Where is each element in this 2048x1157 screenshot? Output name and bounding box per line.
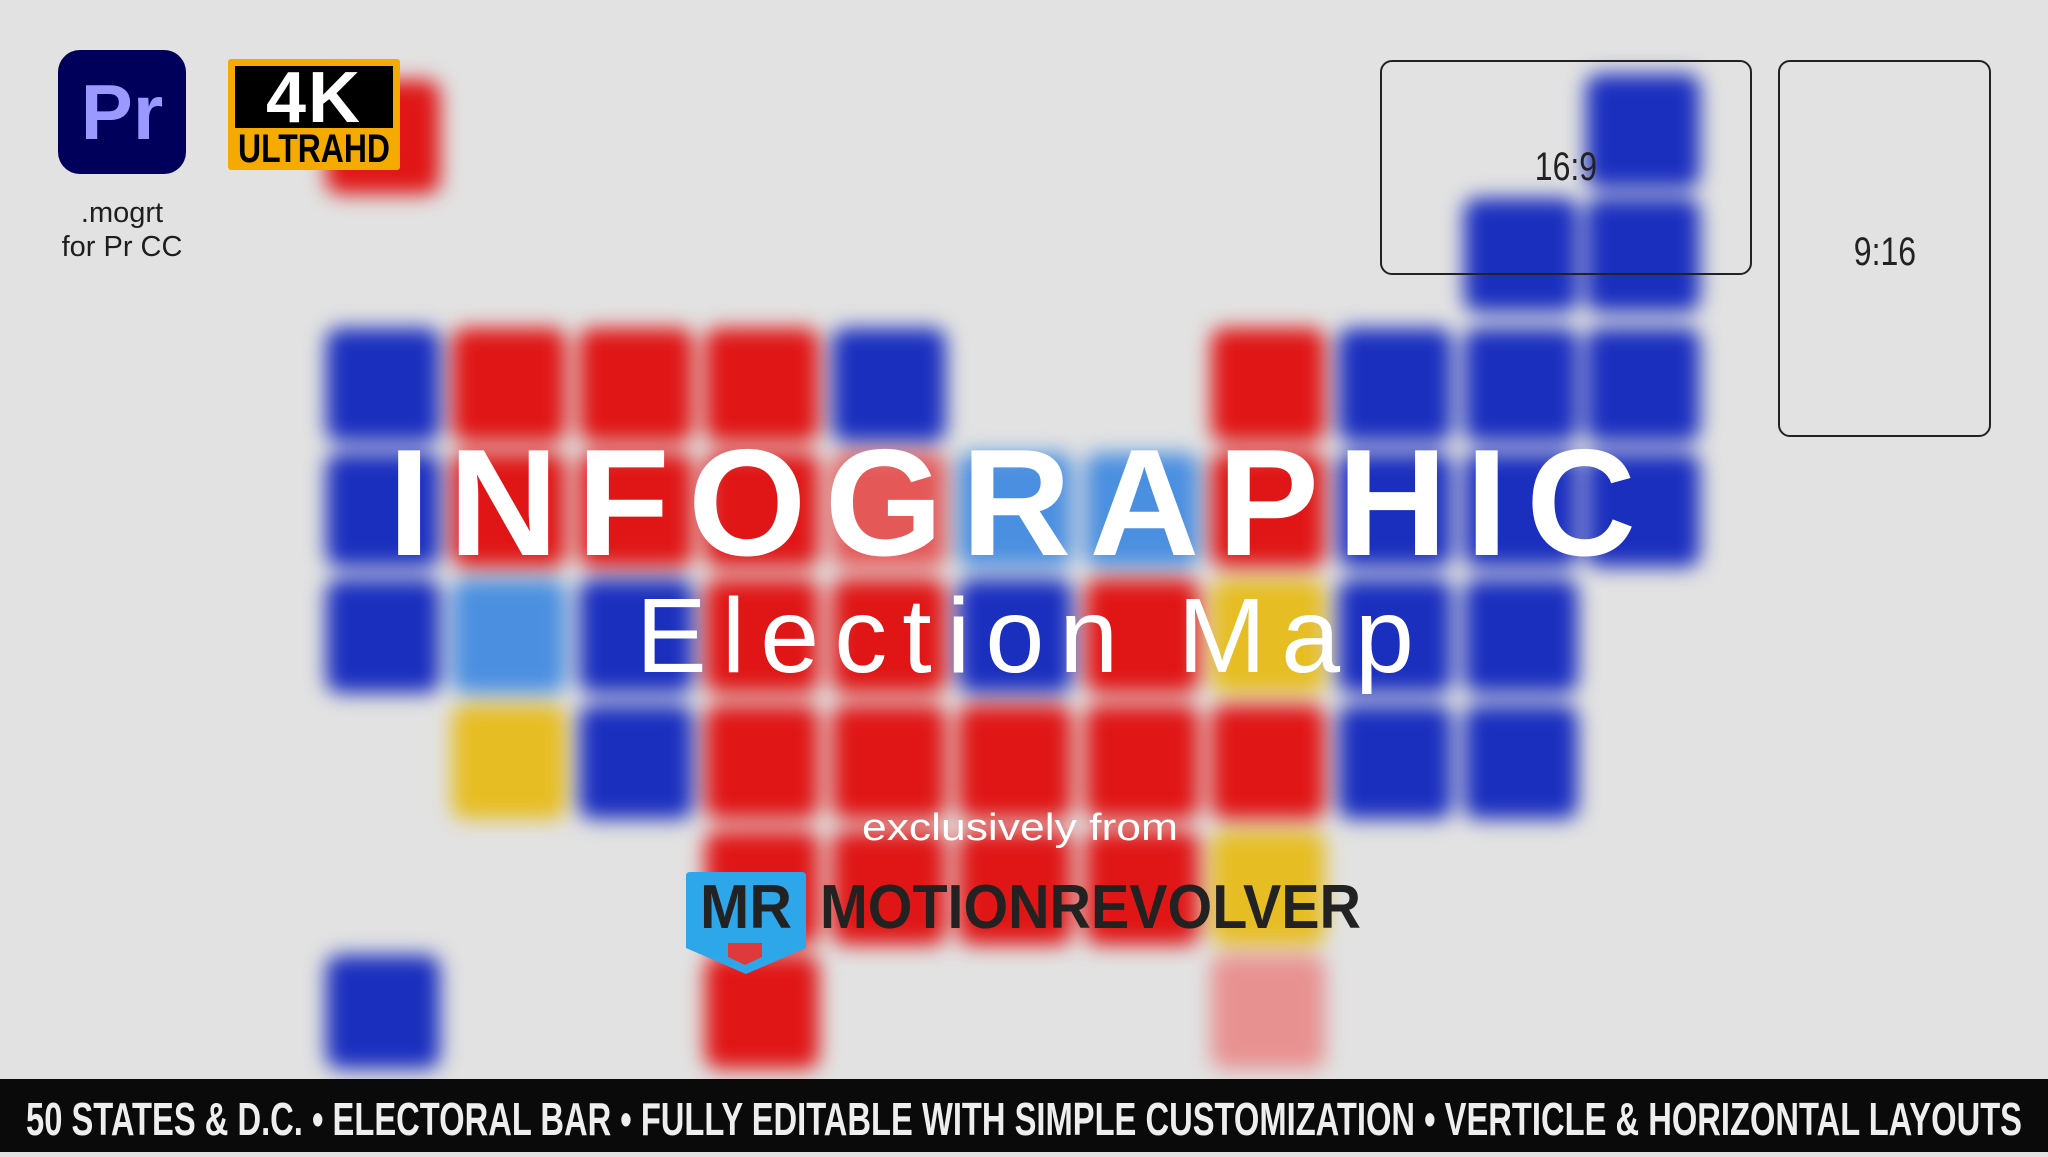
text: exclusively from: exclusively from xyxy=(862,807,1178,849)
subtitle: Election Map xyxy=(636,577,1414,695)
title: INFOGRAPHIC xyxy=(388,418,1636,588)
text: mogrt for Pr CC: for Pr CC xyxy=(62,231,182,263)
frame: 9:16: 9:16 xyxy=(1853,230,1916,274)
icon: 4K Ultra HD badge: 4K xyxy=(266,58,362,138)
text: mogrt for Pr CC xyxy=(62,197,182,263)
logo: MotionRevolver: MR xyxy=(700,873,792,942)
icon: Premiere Pro xyxy=(58,50,186,174)
frame: 16:9 xyxy=(1380,60,1752,275)
logo: MotionRevolver: MOTIONREVOLVER xyxy=(820,873,1361,942)
frame: 16:9: 16:9 xyxy=(1535,145,1597,189)
frame: 9:16 xyxy=(1778,60,1991,437)
icon: 4K Ultra HD badge xyxy=(228,59,400,170)
icon: Premiere Pro: Pr xyxy=(81,68,163,156)
text: mogrt for Pr CC: .mogrt xyxy=(81,197,163,229)
